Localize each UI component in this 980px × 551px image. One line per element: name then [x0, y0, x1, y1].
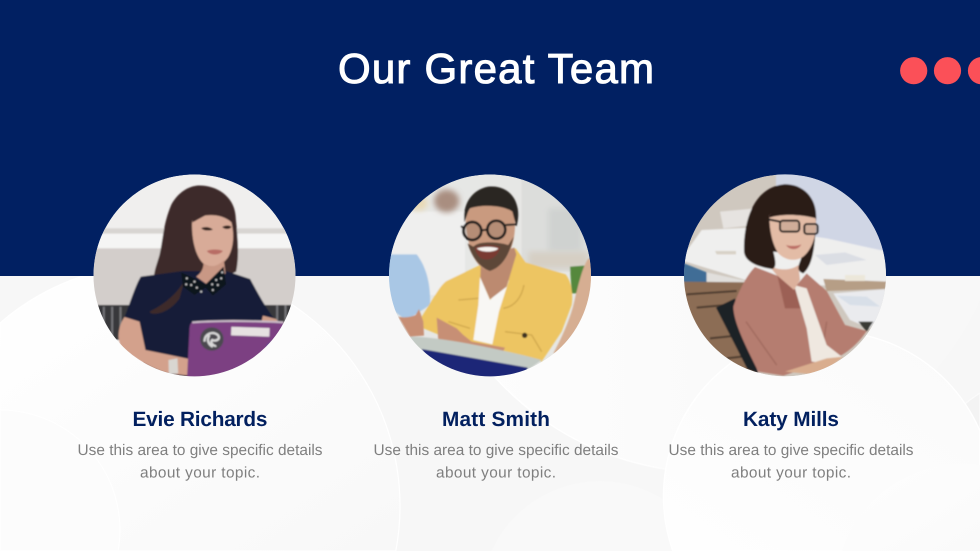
team member: Matt Smith: about your topic.	[436, 464, 556, 482]
team member: Katy Mills: Use this area to give specific details	[668, 442, 914, 459]
team member: Matt Smith: Use this area to give specific details	[374, 442, 619, 459]
team member: Matt Smith: Matt Smith	[442, 408, 550, 431]
portrait: Katy Mills	[680, 172, 890, 382]
lower background with soft circles	[0, 276, 980, 551]
team member: Evie Richards: Evie Richards	[132, 408, 268, 431]
header band	[0, 0, 980, 276]
portrait: Evie Richards	[89, 174, 303, 382]
team member: Evie Richards: about your topic.	[140, 464, 260, 482]
title: Our Great Team	[338, 45, 654, 92]
team member: Katy Mills	[668, 408, 914, 482]
team member: Evie Richards	[78, 408, 323, 482]
team member: Katy Mills: Katy Mills	[743, 408, 839, 431]
decorative red dots	[900, 57, 980, 84]
portrait: Matt Smith	[385, 172, 598, 382]
team member: Katy Mills: about your topic.	[731, 464, 851, 482]
team member: Evie Richards: Use this area to give specific details	[78, 442, 323, 459]
team member: Matt Smith	[374, 408, 619, 482]
